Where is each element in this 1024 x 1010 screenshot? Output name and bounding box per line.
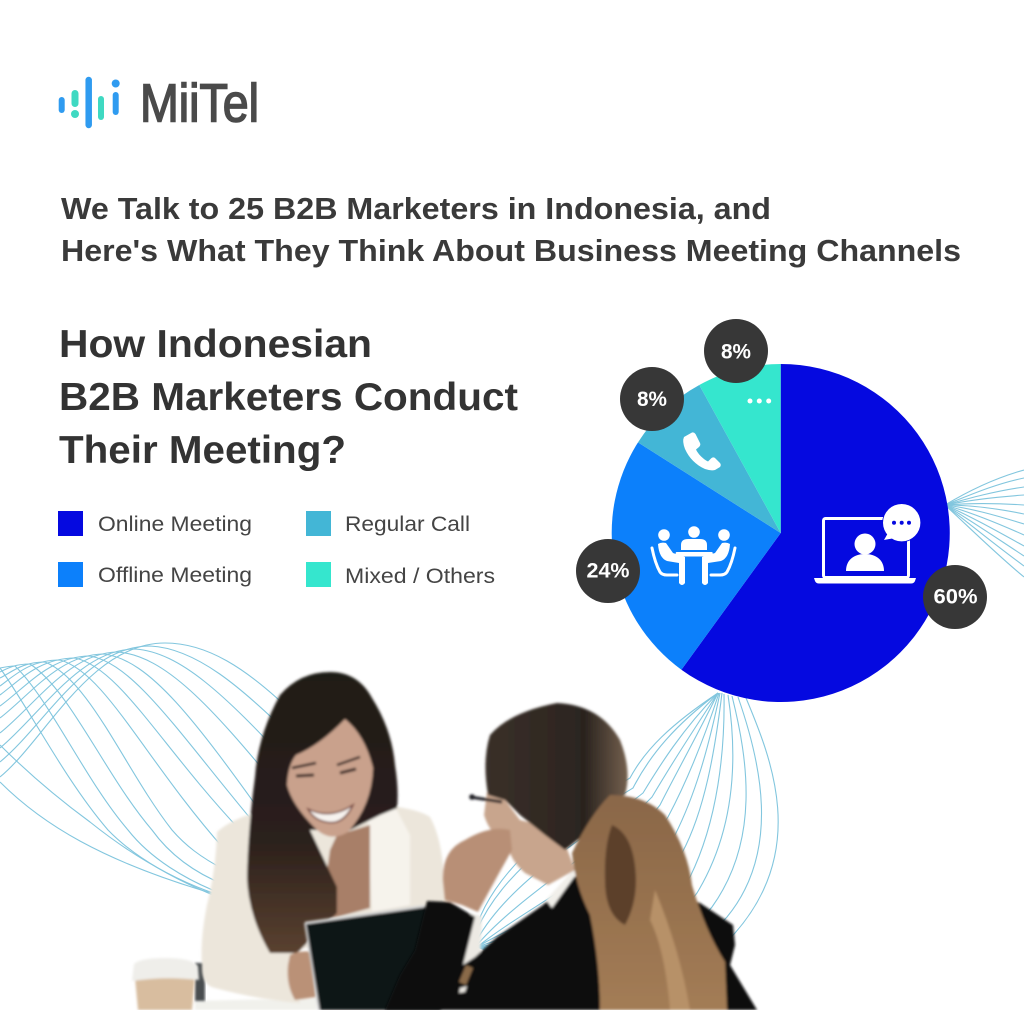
badge: 8% regular call: 8% bbox=[637, 388, 667, 411]
slice: regular call 8% bbox=[638, 385, 781, 533]
legend item: offline meeting bbox=[58, 562, 252, 587]
heading: B2B Marketers Conduct bbox=[59, 376, 518, 419]
badge: 8% mixed or others bbox=[704, 319, 768, 383]
icon: laptop video call bbox=[814, 503, 921, 584]
logo: MiiTel bbox=[62, 74, 259, 134]
title bbox=[61, 191, 961, 268]
black jacket bbox=[385, 870, 757, 1010]
heading: Their Meeting? bbox=[59, 429, 346, 472]
hand bbox=[288, 951, 316, 1000]
legend item: offline meeting: Offline Meeting bbox=[98, 564, 252, 587]
legend item: mixed or others: Mixed / Others bbox=[345, 565, 495, 588]
badge: 60% online meeting bbox=[923, 565, 987, 629]
badge: 60% online meeting: 60% bbox=[934, 586, 978, 608]
face bbox=[287, 719, 373, 837]
legend item: online meeting bbox=[58, 511, 252, 536]
glasses bbox=[470, 797, 502, 802]
decorative wave lines: bottom bbox=[477, 693, 778, 974]
legend item: mixed or others bbox=[306, 562, 495, 588]
title: We Talk to 25 B2B Marketers in Indonesia, and bbox=[61, 191, 771, 226]
legend item: regular call bbox=[306, 511, 470, 536]
logo mark: sound bars bbox=[62, 80, 120, 125]
pie chart bbox=[612, 364, 950, 702]
photo: two women in a meeting bbox=[132, 672, 757, 1010]
badge: 24% offline meeting: 24% bbox=[586, 560, 630, 582]
legend item: online meeting: Online Meeting bbox=[98, 513, 252, 536]
right woman bbox=[385, 703, 757, 1010]
heading bbox=[59, 323, 518, 472]
laptop bbox=[305, 906, 470, 1010]
badge: 24% offline meeting bbox=[576, 539, 640, 603]
ponytail bbox=[572, 795, 727, 1010]
decorative wave lines: right bbox=[945, 470, 1024, 577]
table bbox=[195, 998, 317, 1010]
heading: How Indonesian bbox=[59, 323, 372, 366]
title: Here's What They Think About Business Meeting Channels bbox=[61, 233, 961, 268]
logo wordmark: MiiTel bbox=[140, 74, 259, 134]
icon: meeting table bbox=[652, 526, 735, 585]
white jacket bbox=[202, 805, 450, 1003]
badge: 8% regular call bbox=[620, 367, 684, 431]
icon: phone handset bbox=[683, 432, 721, 470]
neck and face bbox=[484, 792, 575, 885]
slice: online meeting 60% bbox=[681, 364, 950, 702]
chest bbox=[320, 825, 370, 922]
chair bbox=[195, 963, 205, 1001]
slice: offline meeting 24% bbox=[612, 442, 781, 670]
slice: mixed or others 8% bbox=[699, 364, 781, 533]
white cuff bbox=[462, 913, 482, 970]
legend item: regular call: Regular Call bbox=[345, 513, 470, 536]
coffee cup bbox=[132, 958, 199, 1010]
icon: three dots bbox=[748, 398, 771, 404]
hand on face bbox=[443, 829, 512, 912]
badge: 8% mixed or others: 8% bbox=[721, 340, 751, 364]
head hair bbox=[485, 703, 628, 850]
long hair bbox=[247, 672, 398, 953]
watch and bracelet bbox=[459, 965, 473, 985]
decorative wave lines: left bbox=[0, 643, 300, 900]
legend bbox=[58, 511, 495, 588]
left woman bbox=[202, 672, 450, 1003]
